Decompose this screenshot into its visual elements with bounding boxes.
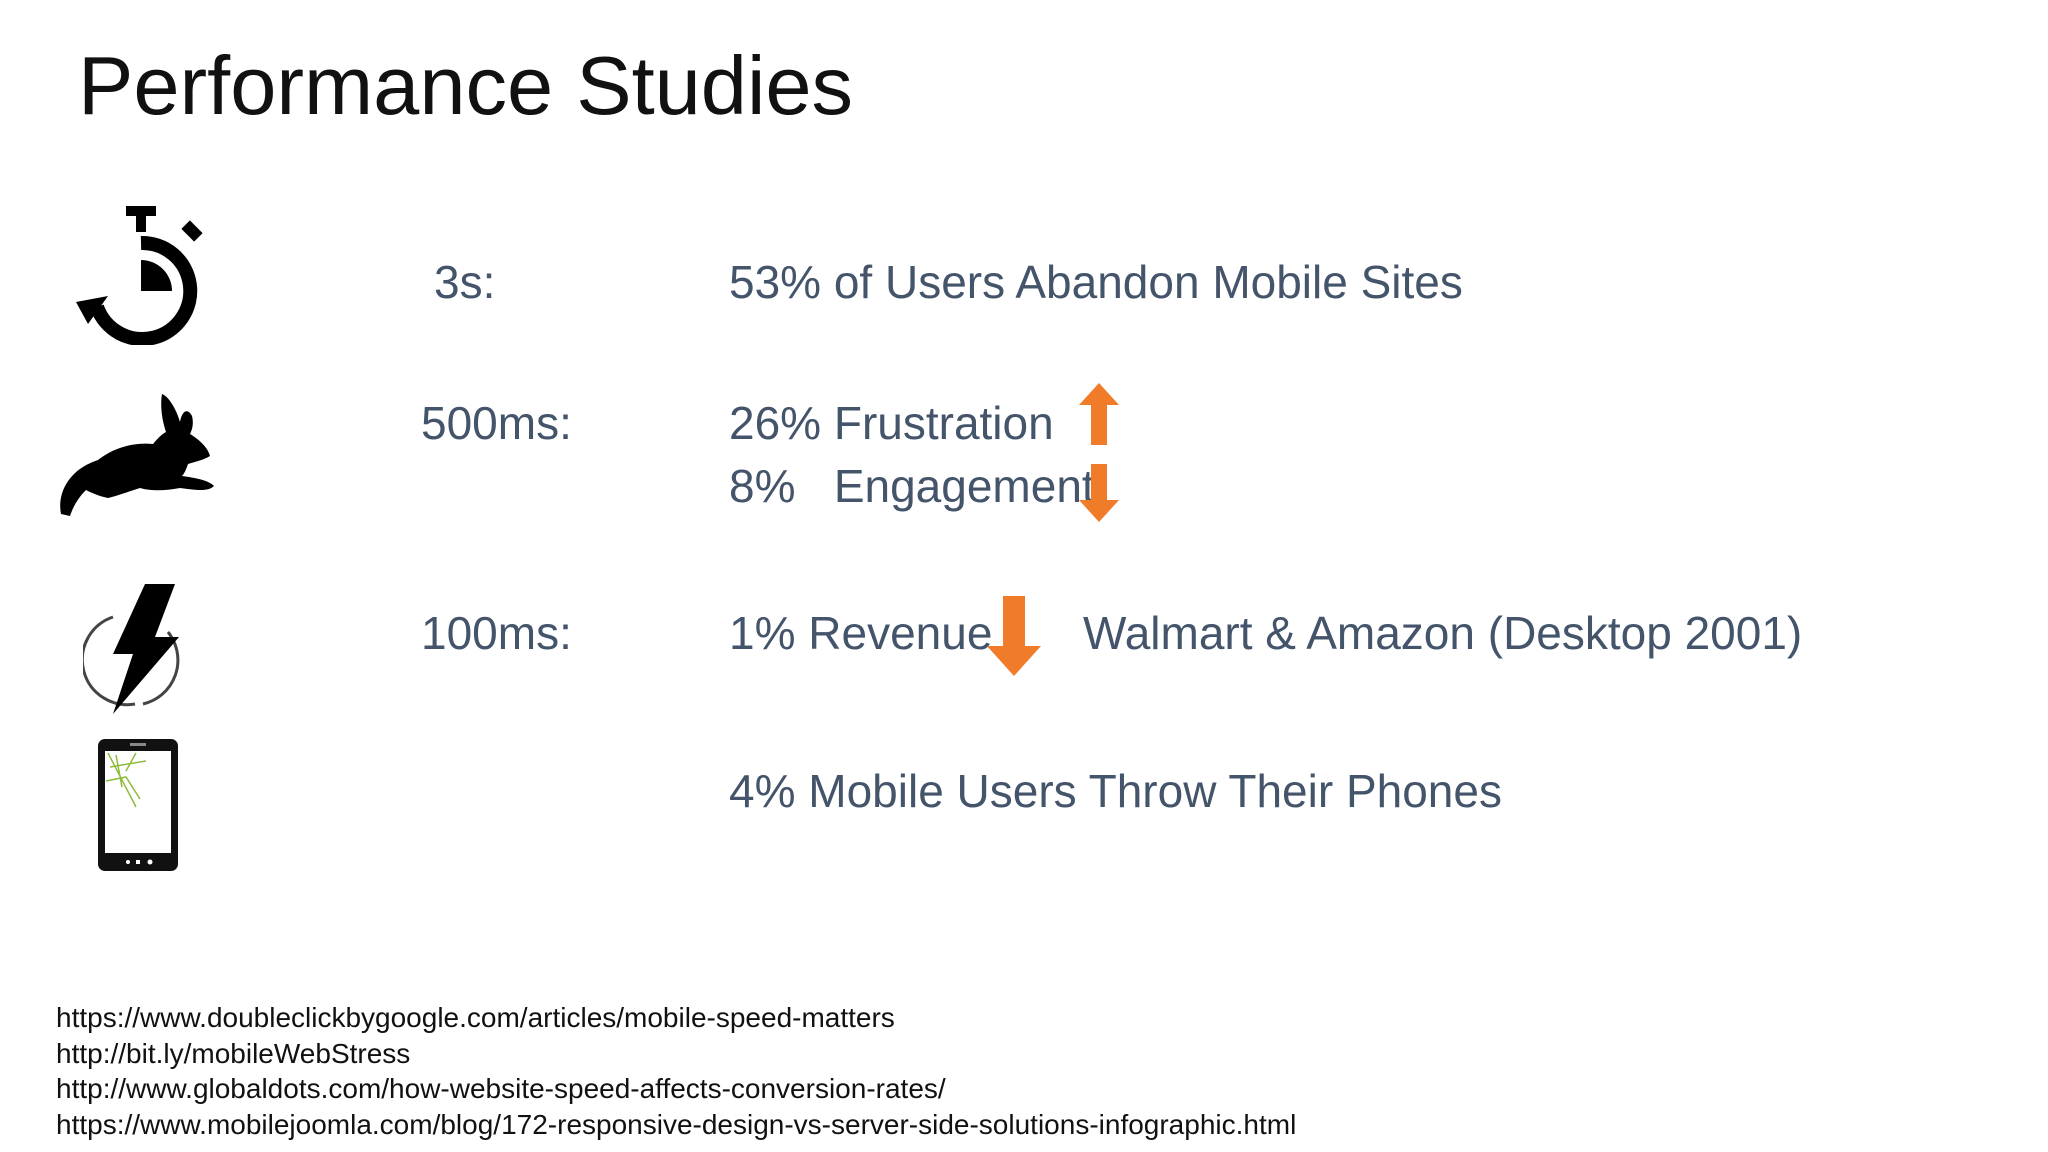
arrow: up: [1079, 383, 1119, 445]
stat: revenue: 1% Revenue: [729, 607, 992, 659]
stat: abandon: 53% of Users Abandon Mobile Sites: [729, 256, 1463, 308]
icon: lightning: [83, 584, 180, 714]
icon: stopwatch: [76, 206, 202, 345]
stat: frustration: 26% Frustration: [729, 397, 1054, 449]
references: https://www.mobilejoomla.com/blog/172-responsive-design-vs-server-side-solutions-infographic.html: [56, 1109, 1296, 1140]
title: Performance Studies: [78, 39, 853, 132]
row 2: 500ms: [421, 383, 1119, 522]
label: 100ms: 100ms:: [421, 607, 572, 659]
arrow: revenue down: [987, 596, 1041, 676]
references: http://bit.ly/mobileWebStress: [56, 1038, 410, 1069]
row 3: 100ms: [421, 596, 1802, 676]
row 1: 3s: [434, 256, 1463, 308]
arrow: down: [1079, 464, 1119, 522]
label: 500ms: 500ms:: [421, 397, 572, 449]
row 4: phones: 4% Mobile Users Throw Their Phones: [729, 765, 1502, 817]
references: https://www.doubleclickbygoogle.com/articles/mobile-speed-matters: [56, 1002, 895, 1033]
stat: walmart amazon: Walmart & Amazon (Desktop 2001): [1083, 607, 1802, 659]
label: 3s: 3s:: [434, 256, 495, 308]
references: http://www.globaldots.com/how-website-speed-affects-conversion-rates/: [56, 1073, 946, 1104]
stat: engagement: 8% Engagement: [729, 460, 1095, 512]
references: [56, 1002, 1296, 1140]
icon: rabbit: [60, 394, 214, 516]
icon: broken phone: [98, 739, 178, 871]
